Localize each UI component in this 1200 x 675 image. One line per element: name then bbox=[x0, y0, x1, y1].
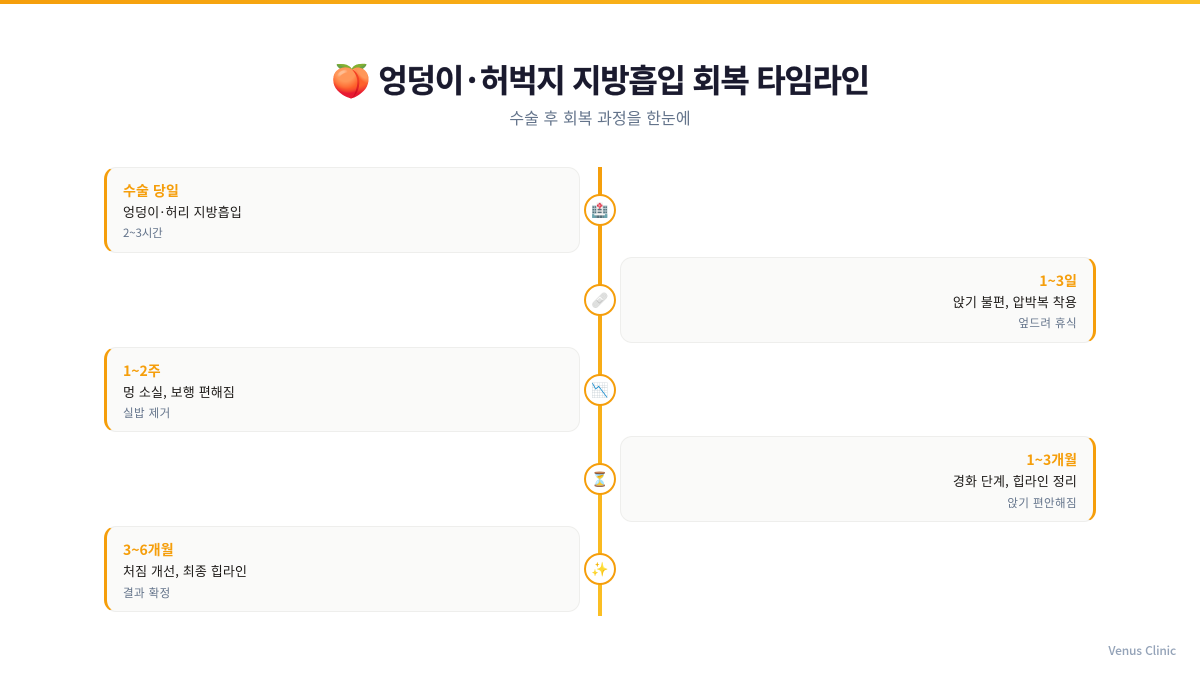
title: 🍑 엉덩이·허벅지 지방흡입 회복 타임라인 bbox=[331, 56, 869, 102]
card: surgery day: 2~3시간 bbox=[123, 225, 163, 241]
icon: hourglass bbox=[584, 463, 616, 495]
icon: falling chart bbox=[584, 374, 616, 406]
top accent bar bbox=[0, 0, 1200, 4]
card: weeks 1-2 bbox=[104, 347, 580, 432]
card: weeks 1-2: 실밥 제거 bbox=[123, 405, 171, 421]
card: days 1-3 bbox=[620, 257, 1096, 343]
card: months 1-3: 앉기 편안해짐 bbox=[1007, 495, 1077, 511]
card: months 1-3 bbox=[620, 436, 1096, 522]
icon: bandage: 🩹 bbox=[591, 290, 609, 310]
card: weeks 1-2: 멍 소실, 보행 편해짐 bbox=[123, 382, 235, 401]
icon: falling chart: 📉 bbox=[591, 380, 609, 400]
card: surgery day: 엉덩이·허리 지방흡입 bbox=[123, 202, 242, 221]
card: months 3-6 bbox=[104, 526, 580, 612]
icon: sparkles bbox=[584, 553, 616, 585]
icon: hospital bbox=[584, 194, 616, 226]
card: weeks 1-2: 1~2주 bbox=[123, 361, 161, 381]
card: days 1-3: 앉기 불편, 압박복 착용 bbox=[953, 292, 1077, 311]
footer brand: Venus Clinic bbox=[1108, 642, 1176, 659]
icon: hospital: 🏥 bbox=[591, 200, 609, 220]
timeline vertical line bbox=[598, 167, 602, 616]
card: months 1-3: 경화 단계, 힙라인 정리 bbox=[953, 471, 1077, 490]
card: months 3-6: 처짐 개선, 최종 힙라인 bbox=[123, 561, 247, 580]
card: months 3-6: 결과 확정 bbox=[123, 585, 171, 601]
card: months 1-3: 1~3개월 bbox=[1026, 450, 1077, 470]
card: months 3-6: 3~6개월 bbox=[123, 540, 174, 560]
card: surgery day bbox=[104, 167, 580, 253]
icon: bandage bbox=[584, 284, 616, 316]
card: surgery day: 수술 당일 bbox=[123, 181, 179, 201]
subtitle: 수술 후 회복 과정을 한눈에 bbox=[509, 105, 691, 129]
card: days 1-3: 1~3일 bbox=[1039, 271, 1077, 291]
icon: hourglass: ⏳ bbox=[591, 469, 609, 489]
icon: sparkles: ✨ bbox=[591, 559, 609, 579]
card: days 1-3: 엎드려 휴식 bbox=[1018, 315, 1077, 331]
